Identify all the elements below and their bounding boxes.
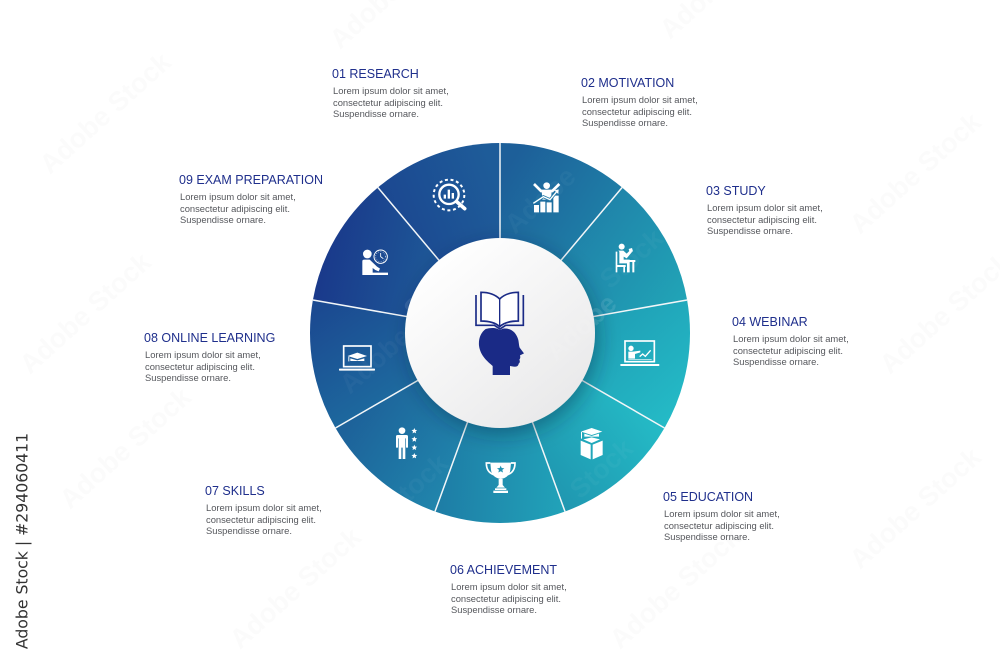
wheel watermarks: Stock — [594, 222, 669, 294]
segment: research — [378, 143, 500, 333]
text block: 04 webinar: consectetur adipiscing elit. — [733, 344, 843, 356]
text block: 02 motivation: Suspendisse ornare. — [582, 117, 668, 128]
center disc watermark — [398, 252, 622, 366]
wheel watermarks: Adobe — [334, 321, 416, 399]
text block: 04 webinar — [732, 315, 849, 367]
text block: 07 skills: consectetur adipiscing elit. — [206, 514, 316, 524]
text block: 09 exam preparation: Lorem ipsum dolor sit amet, — [180, 191, 296, 202]
text block: 07 skills: Lorem ipsum dolor sit amet, — [206, 502, 322, 513]
text block: 05 education: Suspendisse ornare. — [664, 531, 750, 542]
text block: 03 study: Suspendisse ornare. — [707, 225, 793, 236]
wheel watermarks — [334, 161, 669, 519]
text block: 09 exam preparation: 09 EXAM PREPARATION — [179, 173, 323, 187]
text block: 01 research — [332, 67, 449, 119]
text block: 08 online learning: Lorem ipsum dolor sit amet, — [145, 349, 261, 360]
text block: 01 research: Lorem ipsum dolor sit amet, — [333, 85, 449, 96]
wheel watermarks: Adobe — [499, 161, 581, 239]
segment: education — [500, 333, 664, 512]
text block: 04 webinar: Suspendisse ornare. — [733, 356, 819, 367]
text block: 08 online learning — [144, 331, 275, 383]
icon: motivation person on chart — [533, 182, 559, 212]
text block: 05 education: consectetur adipiscing elit. — [664, 520, 774, 530]
icon: research magnifier — [434, 180, 465, 210]
background watermark pattern: Adobe Stock — [34, 46, 177, 179]
text block: 03 study: consectetur adipiscing elit. — [707, 214, 817, 224]
icon: online learning laptop — [339, 346, 375, 371]
icon: webinar laptop — [620, 341, 659, 366]
icon: education book and cap — [581, 428, 603, 459]
segment: skills — [336, 333, 500, 512]
text block: 05 education — [663, 490, 780, 542]
text block: 03 study — [706, 184, 823, 236]
text block: 04 webinar: Lorem ipsum dolor sit amet, — [733, 333, 849, 344]
text block: 02 motivation: Lorem ipsum dolor sit amet, — [582, 94, 698, 105]
text block: 08 online learning: Suspendisse ornare. — [145, 372, 231, 383]
center disc watermark: Adobe — [540, 288, 622, 366]
icon: skills person with stars — [396, 427, 417, 459]
icon: head with open book — [476, 292, 524, 375]
wheel watermarks: Stock — [564, 432, 639, 504]
center disc watermark: Stock — [398, 252, 473, 324]
text block: 06 achievement: consectetur adipiscing elit. — [451, 592, 561, 604]
text block: 01 research: 01 RESEARCH — [332, 67, 419, 81]
segment: webinar — [500, 300, 690, 428]
text block: 03 study: 03 STUDY — [706, 184, 766, 198]
segment: online learning — [310, 300, 500, 428]
text block: 09 exam preparation: Suspendisse ornare. — [180, 214, 266, 225]
center disc — [405, 238, 595, 428]
text block: 05 education: Lorem ipsum dolor sit amet, — [664, 508, 780, 519]
text block: 01 research: consectetur adipiscing elit. — [333, 96, 443, 108]
segment: study — [500, 188, 687, 333]
background watermark pattern: Adobe Stock — [224, 521, 367, 654]
text block: 08 online learning: consectetur adipiscing elit. — [145, 360, 255, 372]
text block: 09 exam preparation: consectetur adipiscing elit. — [180, 202, 290, 214]
icon: achievement trophy — [486, 463, 515, 493]
text block: 05 education: 05 EDUCATION — [663, 490, 753, 504]
icon: exam person with clock — [362, 250, 388, 275]
segment: motivation — [500, 143, 622, 333]
segment: achievement — [435, 333, 565, 523]
background watermark pattern: Adobe Stock — [604, 521, 747, 654]
text block: 07 skills: 07 SKILLS — [205, 484, 265, 498]
text block: 08 online learning: 08 ONLINE LEARNING — [144, 331, 275, 345]
text block: 03 study: Lorem ipsum dolor sit amet, — [707, 202, 823, 213]
text block: 02 motivation — [581, 76, 698, 128]
background watermark pattern: Adobe Stock — [844, 106, 987, 239]
text block: 02 motivation: 02 MOTIVATION — [581, 76, 674, 90]
text block: 07 skills: Suspendisse ornare. — [206, 525, 292, 536]
wheel watermarks: Stock — [379, 447, 454, 519]
text block: 07 skills — [205, 484, 322, 536]
stock credit: Adobe Stock | #294060411 — [12, 433, 32, 649]
text block: 06 achievement: Suspendisse ornare. — [451, 604, 537, 615]
icon: study person at desk — [616, 244, 635, 272]
text block: 06 achievement: 06 ACHIEVEMENT — [450, 563, 557, 577]
text block: 01 research: Suspendisse ornare. — [333, 108, 419, 119]
text block: 02 motivation: consectetur adipiscing elit. — [582, 106, 692, 116]
text block: 06 achievement — [450, 563, 567, 615]
background watermark pattern: Adobe Stock — [14, 246, 157, 379]
text block: 04 webinar: 04 WEBINAR — [732, 315, 808, 329]
background watermark pattern: Adobe Stock — [844, 441, 987, 574]
text block: 09 exam preparation — [179, 173, 323, 225]
background watermark pattern: Adobe Stock — [54, 381, 197, 514]
segment: exam preparation — [313, 188, 500, 333]
text block: 06 achievement: Lorem ipsum dolor sit amet, — [451, 581, 567, 592]
